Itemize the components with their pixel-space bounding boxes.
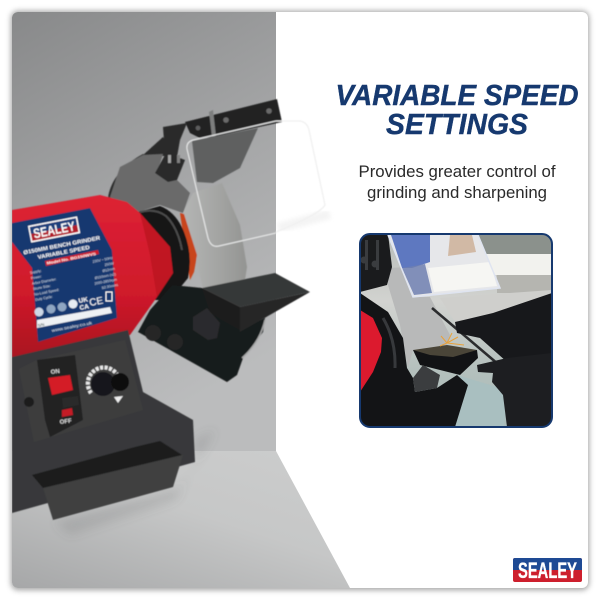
specification text: 250W [104, 261, 115, 267]
specification text: Supply: [30, 269, 42, 275]
off button [62, 408, 73, 417]
label heading [23, 236, 101, 261]
specification text: Power: [31, 274, 42, 280]
specification text: No-Load Speed: [34, 288, 60, 297]
specification text: Ø12mm [102, 267, 115, 273]
description text [358, 163, 556, 202]
sparks [440, 333, 464, 346]
certification marks: CA [79, 303, 90, 312]
specification text [30, 255, 119, 303]
specification text: 230V ~ 50Hz [92, 256, 113, 264]
lower gloved hand [477, 353, 552, 427]
description text: Provides greater control of [358, 163, 556, 181]
workshop background bands [440, 234, 554, 427]
locking knob [193, 308, 220, 340]
lower bracket [138, 285, 265, 382]
back wall [12, 12, 276, 452]
bench grinder [12, 99, 330, 535]
specification text: Duty Cycle: [35, 295, 53, 302]
bracket nuts [145, 325, 183, 350]
specification text: Ø150mm (x2) [94, 272, 116, 280]
on text: ON [50, 369, 60, 376]
certification marks: CE [88, 295, 105, 309]
tool rest [202, 273, 310, 332]
shield mount details [360, 240, 379, 270]
blue specification label [12, 208, 119, 342]
red motor housing [12, 195, 173, 360]
shield haze [278, 214, 330, 228]
flange ring [383, 318, 395, 368]
description text: grinding and sharpening [367, 184, 547, 202]
rear guard disc [108, 136, 190, 214]
wheel [387, 267, 450, 368]
clear shield [388, 235, 500, 297]
product shadow [60, 436, 209, 534]
label heading: Ø150MM BENCH GRINDER [23, 236, 101, 256]
guard rim highlight [242, 320, 265, 358]
off text: OFF [59, 418, 72, 426]
clear shield outline [187, 121, 325, 246]
top left machine body [360, 234, 392, 292]
heading: VARIABLE SPEED [336, 80, 579, 112]
spindle flange [138, 206, 197, 300]
specification text: Arbor Diameter: [32, 277, 57, 286]
photo scene [359, 233, 554, 429]
collection tray [32, 441, 183, 520]
floor [12, 451, 350, 588]
upper gloved hand [455, 293, 552, 362]
machine base [12, 330, 195, 513]
plate screw [24, 397, 34, 407]
power switch [37, 355, 83, 437]
on button [48, 375, 73, 395]
panel: in-use photo [359, 233, 554, 429]
serial number box [37, 307, 112, 328]
clamp knob [155, 123, 187, 182]
top mounting bar [185, 99, 282, 138]
metal shield bracket [192, 128, 258, 183]
certification marks: UK [78, 296, 89, 305]
grinding wheel [183, 183, 247, 290]
tool rest [413, 350, 478, 375]
specification text: Stone Size: [33, 284, 51, 291]
emergency stop tag [62, 396, 79, 408]
locking knob [413, 365, 440, 392]
certification marks [34, 292, 112, 316]
photo border [360, 234, 552, 427]
control plate [113, 376, 127, 388]
file tool [432, 308, 505, 370]
model number: Model No. BG150WVS [46, 252, 97, 265]
label heading: VARIABLE SPEED [37, 245, 90, 261]
heading: SETTINGS [386, 109, 529, 141]
dial knob [111, 373, 129, 391]
red motor [360, 310, 382, 392]
website: www.sealey.co.uk [51, 320, 94, 333]
model strip [45, 250, 99, 266]
black flange and base [360, 293, 468, 427]
motor neck shading [140, 213, 173, 297]
serial label: S/N [37, 322, 45, 328]
specification text: 2000-2850rpm [94, 278, 117, 286]
dial arrow [114, 396, 123, 403]
panel: product scene [12, 12, 350, 588]
heading [336, 80, 579, 141]
specification text: S2:30mins [101, 283, 119, 290]
brand badge on label: SEALEY [32, 219, 76, 241]
speed dial [88, 367, 129, 403]
